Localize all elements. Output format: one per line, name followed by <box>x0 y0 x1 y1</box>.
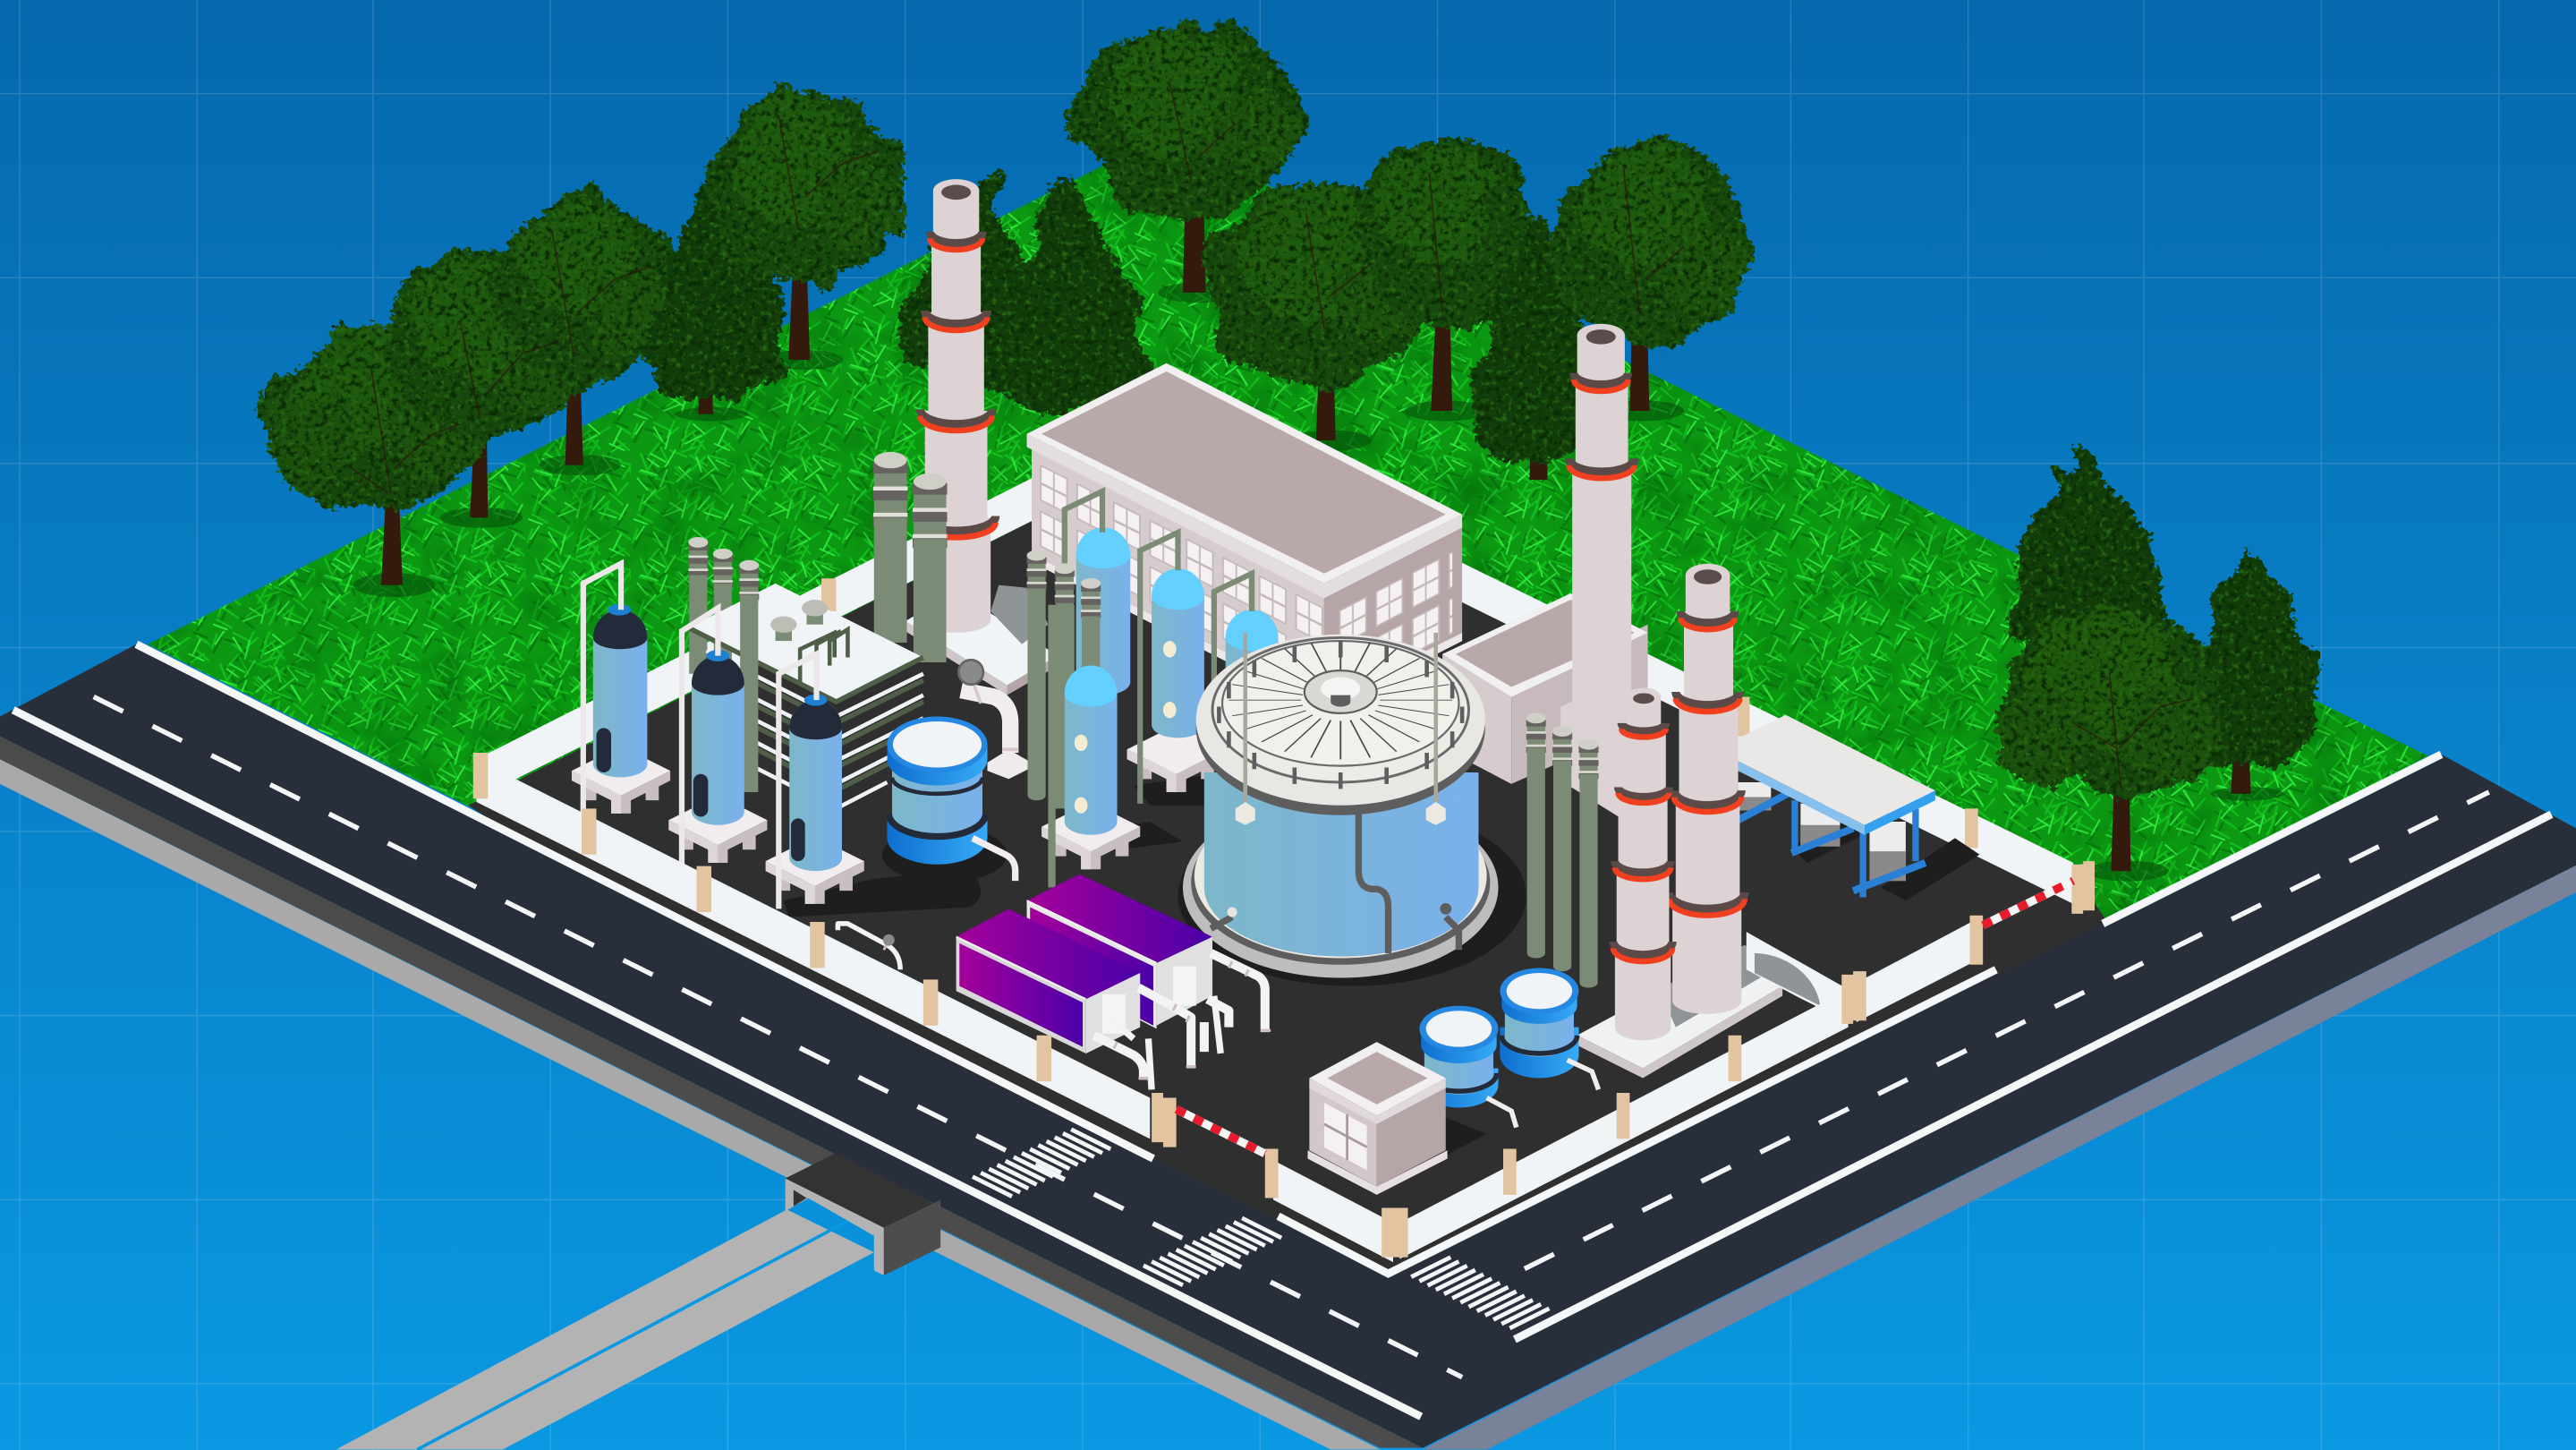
conifer <box>1470 210 1602 459</box>
chimney plinth right <box>1560 690 1653 822</box>
heat exchanger stack <box>688 584 923 808</box>
small tank right <box>1500 968 1599 1089</box>
tree <box>1998 607 2223 796</box>
plant ground <box>468 519 2106 1274</box>
main office building <box>1027 363 1462 712</box>
second building <box>1442 593 1648 784</box>
culvert box <box>786 1153 940 1275</box>
chimney: centre <box>1569 324 1635 720</box>
road surface <box>0 644 2576 1448</box>
small column <box>688 537 708 674</box>
pipe joint rings <box>884 943 1271 1078</box>
fence posts <box>473 753 2095 1258</box>
road centre dashes <box>94 697 2489 1378</box>
filter vessel B <box>668 608 767 867</box>
green columns right <box>1526 713 1599 988</box>
main storage tank <box>1177 633 1526 986</box>
tree <box>1552 141 1749 345</box>
conifer <box>649 161 784 394</box>
chimney: back left <box>917 179 996 633</box>
gate barrier right <box>1983 881 2073 925</box>
filter vessel C <box>766 654 864 908</box>
white process pipes <box>837 924 1265 1089</box>
floor shadows <box>784 772 1979 917</box>
road side faces <box>0 737 2576 1449</box>
small tank front <box>1419 1006 1517 1128</box>
wall with arch <box>1747 932 1849 1022</box>
conifer <box>899 177 1020 395</box>
chimney plinth <box>905 585 1058 695</box>
tree <box>707 92 904 283</box>
underground pipe strip <box>336 1209 874 1449</box>
back perimeter walls <box>476 476 2073 904</box>
tree <box>1357 138 1535 328</box>
small column over plates <box>739 560 759 792</box>
large column <box>913 473 948 662</box>
tree <box>1075 23 1298 214</box>
stacked plates <box>688 584 923 702</box>
road curbs <box>13 644 2551 1417</box>
tree <box>385 243 582 440</box>
small column <box>713 549 733 682</box>
conifer <box>995 181 1148 410</box>
chimney: short right <box>1613 687 1672 1040</box>
trees right group <box>1998 444 2318 871</box>
crosswalks <box>973 1130 1549 1328</box>
front perimeter walls <box>476 759 1971 1262</box>
thin green pipe <box>1048 806 1056 887</box>
chimney: tall right <box>1669 564 1745 1014</box>
filter vessel A <box>572 564 670 822</box>
blue vessel with stand <box>1127 568 1226 792</box>
grass field <box>148 135 2428 1150</box>
valve pipe <box>958 660 1028 779</box>
service canopy <box>1715 715 1935 898</box>
blue vessel behind tank <box>1226 610 1278 723</box>
large column <box>873 452 907 643</box>
conifer <box>2010 444 2164 657</box>
tree <box>495 194 680 385</box>
blue vessel with stand front <box>1041 666 1140 869</box>
tank rods <box>1245 633 1436 802</box>
trees behind the plant <box>266 23 1749 585</box>
tank valves <box>1211 917 1458 950</box>
caps on plate <box>770 600 828 641</box>
guard house <box>1308 1042 1487 1195</box>
gate barrier left <box>1177 1109 1265 1154</box>
tank lid <box>1196 635 1485 815</box>
small wall valve <box>883 934 895 946</box>
gate barrier left stripes <box>1177 1109 1265 1154</box>
open tank large <box>882 717 1016 883</box>
purple treatment box back <box>1027 874 1212 1028</box>
tree branches <box>352 82 1684 493</box>
green columns centre <box>1027 550 1101 808</box>
tree <box>1203 181 1433 385</box>
tree <box>266 322 483 513</box>
blue vessel back <box>1076 527 1130 695</box>
green columns behind vessels <box>688 452 948 682</box>
chimney plinth and shadow <box>1577 945 1782 1078</box>
gate barrier right stripes <box>1983 881 2073 925</box>
green riser pipes <box>1065 491 1252 804</box>
conifer <box>2188 542 2318 762</box>
purple treatment box front <box>956 908 1140 1053</box>
